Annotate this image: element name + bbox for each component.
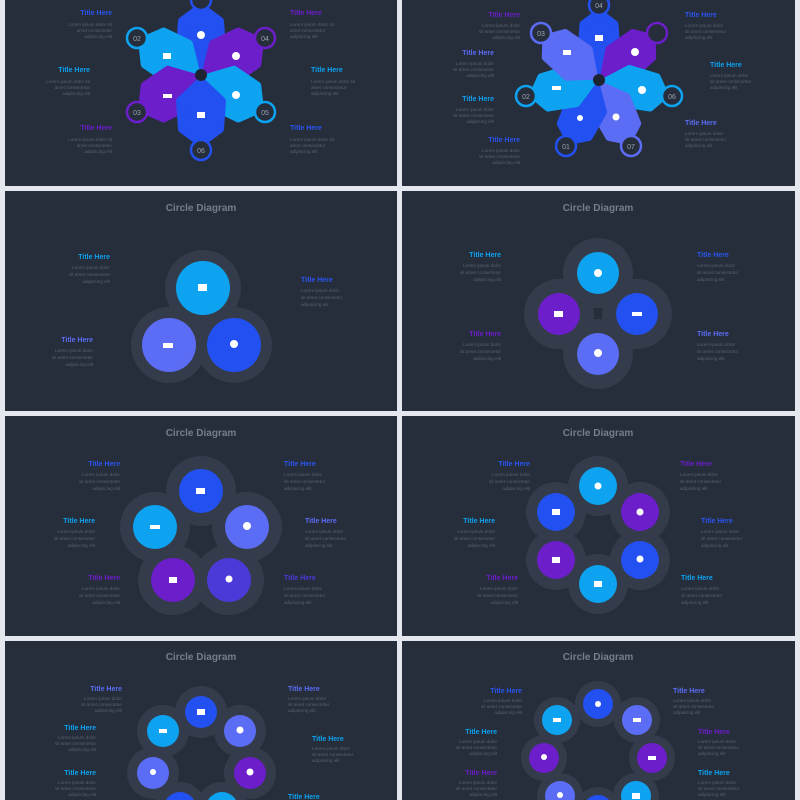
text blocks: slide 3: sit amet consectetur: [301, 295, 343, 300]
text blocks: six petal: amet consectetur: [311, 85, 347, 90]
text blocks: six petal: Title Here: [290, 125, 322, 132]
text blocks: six petal: Lorem ipsum dolor sit: [68, 137, 113, 142]
panel: six petal flower: [127, 0, 275, 160]
text blocks: slide 4: adipiscing elit: [473, 277, 502, 282]
text blocks: slide 3: Lorem ipsum dolor: [72, 265, 110, 270]
text blocks: seven petal: sit amet consectetur: [479, 154, 520, 159]
text blocks: six petal: Lorem ipsum dolor sit: [290, 137, 335, 142]
text blocks: slide 4: sit amet consectetur: [460, 270, 501, 275]
text blocks: slide 7: adipiscing elit: [94, 708, 123, 713]
text blocks: slide 7: adipiscing elit: [68, 747, 97, 752]
text blocks: seven petal: Lorem ipsum dolor: [482, 23, 520, 28]
text blocks: slide 3: adipiscing elit: [82, 279, 111, 284]
panel: seven petal flower: 07: [627, 144, 635, 151]
text blocks: slide 7: Lorem ipsum dolor: [288, 696, 327, 701]
text blocks: slide 4: sit amet consectetur: [697, 349, 739, 354]
text blocks: seven petal: adipiscing elit: [466, 73, 495, 78]
panel: six petal flower: 04: [261, 36, 269, 43]
text blocks: seven petal: adipiscing elit: [492, 160, 521, 165]
text blocks: slide 6: adipiscing elit: [681, 600, 709, 605]
text blocks: slide 6: Title Here: [680, 461, 712, 468]
text blocks: slide 6: Title Here: [681, 575, 713, 582]
text blocks: slide 5: sit amet consectetur: [54, 536, 95, 541]
text blocks: slide 3: Title Here: [61, 337, 93, 344]
text blocks: six petal: adipiscing elit: [84, 149, 113, 154]
text blocks: slide 6: Title Here: [498, 461, 530, 468]
text blocks: slide 8: sit amet consectetur: [698, 745, 740, 750]
text blocks: seven petal: adipiscing elit: [685, 35, 713, 40]
text blocks: slide 8: adipiscing elit: [673, 710, 701, 715]
text blocks: slide 8: Lorem ipsum dolor: [484, 698, 522, 703]
text blocks: slide 8: Lorem ipsum dolor: [673, 698, 712, 703]
text blocks: slide 3: adipiscing elit: [301, 302, 329, 307]
text blocks: slide 8: Lorem ipsum dolor: [698, 739, 737, 744]
text blocks: slide 7: sit amet consectetur: [55, 741, 96, 746]
text blocks: slide 6: [454, 461, 743, 605]
text blocks: six petal: Title Here: [80, 10, 112, 17]
text blocks: slide 5: Title Here: [88, 575, 120, 582]
panel: seven petal flower: 01: [562, 144, 570, 151]
text blocks: slide 3: Title Here: [78, 254, 110, 261]
text blocks: slide 8: sit amet consectetur: [698, 786, 740, 791]
text blocks: seven petal: Title Here: [710, 62, 742, 69]
text blocks: six petal: amet consectetur: [290, 28, 326, 33]
panel: seven petal flower: 06: [668, 94, 676, 101]
chart: eight circles: [521, 681, 675, 800]
text blocks: seven petal: Title Here: [685, 120, 717, 127]
text blocks: six petal: Lorem ipsum dolor sit: [290, 22, 335, 27]
text blocks: slide 6: sit amet consectetur: [701, 536, 743, 541]
text blocks: seven petal: Lorem ipsum dolor: [456, 107, 494, 112]
text blocks: slide 6: Title Here: [701, 518, 733, 525]
text blocks: seven petal: adipiscing elit: [685, 143, 713, 148]
text blocks: slide 7: Title Here: [288, 686, 320, 693]
text blocks: seven petal: adipiscing elit: [492, 35, 521, 40]
chart: five circles: [120, 456, 282, 615]
text blocks: six petal: adipiscing elit: [311, 91, 339, 96]
panel: seven petal flower: 03: [537, 31, 545, 38]
text blocks: seven petal: sit amet consectetur: [479, 29, 520, 34]
text blocks: slide 5: adipiscing elit: [284, 486, 312, 491]
text blocks: slide 6: Lorem ipsum dolor: [480, 586, 518, 591]
text blocks: slide 5: Title Here: [305, 518, 337, 525]
text blocks: slide 4: Lorem ipsum dolor: [463, 263, 501, 268]
panel: seven petal flower: 04: [595, 3, 603, 10]
text blocks: slide 8: Title Here: [465, 729, 497, 736]
text blocks: slide 5: adipiscing elit: [67, 543, 96, 548]
text blocks: slide 4: Lorem ipsum dolor: [463, 342, 501, 347]
text blocks: slide 8: Lorem ipsum dolor: [459, 739, 497, 744]
text blocks: slide 8: Lorem ipsum dolor: [698, 780, 737, 785]
text blocks: slide 8: adipiscing elit: [698, 792, 726, 797]
text blocks: seven petal: Title Here: [488, 12, 520, 19]
panel: seven petal flower: 02: [522, 94, 530, 101]
text blocks: slide 3: [52, 254, 343, 367]
text blocks: slide 6: adipiscing elit: [467, 543, 496, 548]
text blocks: slide 5: sit amet consectetur: [79, 593, 120, 598]
text blocks: slide 7: Lorem ipsum dolor: [58, 780, 96, 785]
text blocks: slide 5: Lorem ipsum dolor: [82, 472, 120, 477]
text blocks: slide 7: sit amet consectetur: [312, 752, 354, 757]
text blocks: slide 5: Lorem ipsum dolor: [284, 586, 323, 591]
text blocks: six petal: Title Here: [290, 10, 322, 17]
text blocks: slide 5: sit amet consectetur: [79, 479, 120, 484]
text blocks: slide 5: sit amet consectetur: [284, 479, 326, 484]
text blocks: six petal: Lorem ipsum dolor sit: [46, 79, 91, 84]
text blocks: slide 4: adipiscing elit: [697, 277, 725, 282]
text blocks: slide 7: adipiscing elit: [312, 758, 340, 763]
text blocks: seven petal: sit amet consectetur: [710, 79, 752, 84]
text blocks: slide 4: sit amet consectetur: [460, 349, 501, 354]
text blocks: slide 7: Title Here: [312, 736, 344, 743]
heading: slide 8: Circle Diagram: [563, 652, 633, 663]
text blocks: slide 4: Title Here: [697, 252, 729, 259]
text blocks: slide 3: Title Here: [301, 277, 333, 284]
text blocks: seven petal: [453, 12, 752, 165]
text blocks: seven petal: Title Here: [685, 12, 717, 19]
heading: slide 6: Circle Diagram: [563, 428, 633, 439]
text blocks: slide 3: sit amet consectetur: [69, 272, 110, 277]
text blocks: six petal: amet consectetur: [77, 28, 112, 33]
text blocks: slide 7: adipiscing elit: [68, 792, 97, 797]
text blocks: slide 4: Lorem ipsum dolor: [697, 263, 736, 268]
text blocks: slide 7: Title Here: [64, 770, 96, 777]
text blocks: seven petal: sit amet consectetur: [453, 113, 494, 118]
text blocks: slide 5: Lorem ipsum dolor: [305, 529, 344, 534]
text blocks: slide 3: Lorem ipsum dolor: [301, 288, 340, 293]
text blocks: slide 8: Title Here: [698, 770, 730, 777]
text blocks: slide 5: Lorem ipsum dolor: [284, 472, 323, 477]
text blocks: slide 8: sit amet consectetur: [456, 745, 497, 750]
text blocks: six petal: adipiscing elit: [62, 91, 91, 96]
chart: four circles: [524, 238, 672, 389]
chart: three circles: [131, 250, 272, 383]
panel: six petal flower: 05: [261, 110, 269, 117]
text blocks: slide 6: Lorem ipsum dolor: [701, 529, 740, 534]
text blocks: slide 5: sit amet consectetur: [284, 593, 326, 598]
text blocks: slide 6: sit amet consectetur: [489, 479, 530, 484]
chart: seven circles: [127, 686, 276, 800]
text blocks: slide 6: adipiscing elit: [680, 486, 708, 491]
text blocks: slide 3: sit amet consectetur: [52, 355, 93, 360]
text blocks: slide 6: adipiscing elit: [490, 600, 519, 605]
text blocks: slide 3: adipiscing elit: [65, 362, 94, 367]
text blocks: slide 8: adipiscing elit: [469, 751, 498, 756]
heading: slide 7: Circle Diagram: [166, 652, 236, 663]
text blocks: slide 7: Title Here: [64, 725, 96, 732]
panel: seven petal flower: [516, 0, 682, 156]
text blocks: slide 6: Lorem ipsum dolor: [457, 529, 495, 534]
text blocks: slide 6: Title Here: [486, 575, 518, 582]
text blocks: slide 6: sit amet consectetur: [477, 593, 518, 598]
text blocks: slide 7: sit amet consectetur: [81, 702, 122, 707]
text blocks: slide 7: adipiscing elit: [288, 708, 316, 713]
text blocks: six petal: adipiscing elit: [290, 34, 318, 39]
text blocks: slide 4: Title Here: [469, 331, 501, 338]
text blocks: slide 8: [456, 688, 740, 797]
text blocks: slide 8: sit amet consectetur: [456, 786, 497, 791]
text blocks: slide 5: adipiscing elit: [92, 486, 121, 491]
text blocks: slide 5: adipiscing elit: [284, 600, 312, 605]
text blocks: seven petal: Lorem ipsum dolor: [710, 73, 749, 78]
text blocks: slide 8: Title Here: [673, 688, 705, 695]
text blocks: slide 5: Title Here: [284, 575, 316, 582]
text blocks: slide 5: Lorem ipsum dolor: [57, 529, 95, 534]
text blocks: slide 6: Lorem ipsum dolor: [681, 586, 720, 591]
text blocks: slide 8: adipiscing elit: [469, 792, 498, 797]
text blocks: six petal: Lorem ipsum dolor sit: [68, 22, 113, 27]
heading: slide 5: Circle Diagram: [166, 428, 236, 439]
text blocks: six petal: [46, 10, 356, 154]
text blocks: slide 6: Lorem ipsum dolor: [680, 472, 719, 477]
text blocks: slide 5: sit amet consectetur: [305, 536, 347, 541]
text blocks: six petal: amet consectetur: [290, 143, 326, 148]
text blocks: seven petal: Title Here: [462, 50, 494, 57]
text blocks: slide 5: Title Here: [284, 461, 316, 468]
heading: slide 3: Circle Diagram: [166, 203, 236, 214]
text blocks: six petal: adipiscing elit: [290, 149, 318, 154]
text blocks: slide 6: sit amet consectetur: [681, 593, 723, 598]
text blocks: slide 7: sit amet consectetur: [55, 786, 96, 791]
text blocks: slide 5: Title Here: [88, 461, 120, 468]
panel: six petal flower: 03: [133, 110, 141, 117]
text blocks: seven petal: Title Here: [488, 137, 520, 144]
text blocks: slide 5: adipiscing elit: [305, 543, 333, 548]
text blocks: slide 7: Lorem ipsum dolor: [312, 746, 351, 751]
text blocks: slide 3: Lorem ipsum dolor: [55, 348, 93, 353]
text blocks: six petal: amet consectetur: [77, 143, 112, 148]
text blocks: seven petal: sit amet consectetur: [685, 137, 727, 142]
text blocks: six petal: amet consectetur: [55, 85, 90, 90]
text blocks: seven petal: adipiscing elit: [466, 119, 495, 124]
text blocks: six petal: Title Here: [311, 67, 343, 74]
text blocks: seven petal: sit amet consectetur: [453, 67, 494, 72]
text blocks: slide 4: sit amet consectetur: [697, 270, 739, 275]
text blocks: slide 4: [460, 252, 739, 361]
text blocks: slide 6: adipiscing elit: [502, 486, 531, 491]
text blocks: slide 8: Title Here: [698, 729, 730, 736]
text blocks: seven petal: Title Here: [462, 96, 494, 103]
text blocks: slide 7: Title Here: [90, 686, 122, 693]
text blocks: slide 7: sit amet consectetur: [288, 702, 330, 707]
heading: slide 4: Circle Diagram: [563, 203, 633, 214]
text blocks: slide 7: Lorem ipsum dolor: [58, 735, 96, 740]
text blocks: slide 8: Title Here: [465, 770, 497, 777]
text blocks: slide 4: adipiscing elit: [697, 356, 725, 361]
text blocks: slide 8: Lorem ipsum dolor: [459, 780, 497, 785]
text blocks: slide 7: [55, 686, 354, 800]
chart: six circles: [526, 456, 670, 614]
text blocks: six petal: Lorem ipsum dolor sit: [311, 79, 356, 84]
text blocks: slide 4: Lorem ipsum dolor: [697, 342, 736, 347]
text blocks: six petal: Title Here: [80, 125, 112, 132]
text blocks: slide 8: sit amet consectetur: [481, 704, 522, 709]
text blocks: slide 5: adipiscing elit: [92, 600, 121, 605]
text blocks: slide 5: Lorem ipsum dolor: [82, 586, 120, 591]
text blocks: slide 8: Title Here: [490, 688, 522, 695]
text blocks: slide 8: adipiscing elit: [698, 751, 726, 756]
text blocks: seven petal: Lorem ipsum dolor: [482, 148, 520, 153]
text blocks: slide 4: Title Here: [469, 252, 501, 259]
text blocks: seven petal: sit amet consectetur: [685, 29, 727, 34]
text blocks: six petal: Title Here: [58, 67, 90, 74]
text blocks: slide 6: adipiscing elit: [701, 543, 729, 548]
panel: six petal flower: 02: [133, 36, 141, 43]
panel: six petal flower: 06: [197, 148, 205, 155]
text blocks: slide 4: adipiscing elit: [473, 356, 502, 361]
text blocks: slide 7: Lorem ipsum dolor: [84, 696, 122, 701]
text blocks: seven petal: Lorem ipsum dolor: [456, 61, 494, 66]
text blocks: six petal: adipiscing elit: [84, 34, 113, 39]
text blocks: slide 4: Title Here: [697, 331, 729, 338]
text blocks: slide 8: sit amet consectetur: [673, 704, 715, 709]
text blocks: slide 8: adipiscing elit: [494, 710, 523, 715]
text blocks: seven petal: Lorem ipsum dolor: [685, 23, 724, 28]
text blocks: slide 5: [54, 461, 347, 605]
text blocks: seven petal: Lorem ipsum dolor: [685, 131, 724, 136]
text blocks: slide 6: Lorem ipsum dolor: [492, 472, 530, 477]
text blocks: slide 6: Title Here: [463, 518, 495, 525]
text blocks: slide 6: sit amet consectetur: [680, 479, 722, 484]
text blocks: slide 5: Title Here: [63, 518, 95, 525]
text blocks: slide 6: sit amet consectetur: [454, 536, 495, 541]
text blocks: seven petal: adipiscing elit: [710, 85, 738, 90]
